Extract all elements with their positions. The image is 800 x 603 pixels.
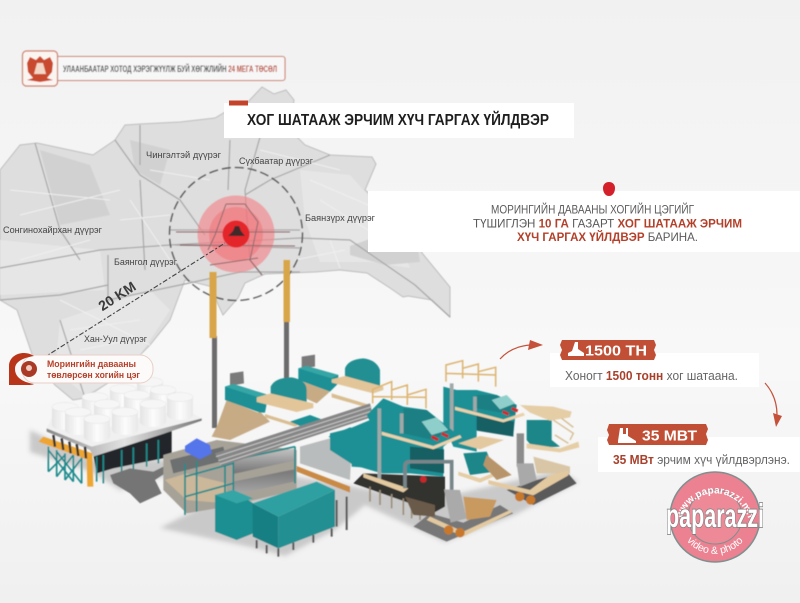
label pill — [22, 355, 153, 383]
arrow 1 head — [528, 340, 543, 350]
description block — [473, 182, 742, 244]
boiler 1 dark base — [353, 473, 445, 515]
red pin tab — [9, 353, 34, 385]
stamp disc — [670, 472, 760, 562]
label: Chingeltei: Чингэлтэй дүүрэг — [146, 150, 222, 160]
location label — [9, 353, 153, 385]
label: Bayanzurkh: Баянзүрх дүүрэг — [305, 213, 376, 223]
card background — [550, 353, 759, 387]
map darker terrain patches — [40, 140, 420, 265]
stat card: 1500 TN — [550, 340, 759, 387]
icon: red marker — [603, 182, 615, 196]
stair section to boiler 2 — [483, 455, 512, 480]
right half of plant — [330, 361, 579, 542]
map roads and district borders — [0, 125, 450, 398]
arched unit 1 body — [271, 377, 307, 407]
card background — [598, 437, 800, 472]
enclosure left top — [215, 490, 253, 503]
storage platform underside — [93, 430, 172, 473]
boiler 2 red valves — [503, 408, 518, 414]
boiler 1 side teal lower — [463, 452, 495, 475]
enclosure left block — [215, 490, 253, 540]
waste plant illustration — [30, 260, 579, 557]
hopper chutes — [53, 435, 86, 458]
tag ribbon — [560, 340, 656, 360]
boiler 1 vent panel — [422, 417, 448, 435]
curved arrow to 35 MW — [765, 383, 782, 427]
boiler 2 mid deck — [527, 442, 579, 452]
city district map — [0, 87, 450, 400]
ribbon frame — [56, 56, 285, 80]
distance label 20 KM: 20 KM — [95, 278, 139, 314]
chimney 2 gold top — [284, 260, 290, 322]
left teal unit top — [225, 384, 268, 398]
white grey machinery — [300, 438, 352, 480]
boiler 1 ducts — [379, 408, 402, 480]
label line 2: төвлөрсөн хогийн цэг — [47, 370, 140, 381]
tag ribbon — [607, 424, 708, 445]
description line 2: ТҮШИГЛЭН 10 ГА ГАЗАРТ ХОГ ШАТААЖ ЭРЧИМ — [473, 216, 742, 230]
boiler 1 red drum — [420, 476, 427, 483]
card text: Хоногт 1500 тонн хог шатаана. — [565, 369, 738, 383]
teal frame — [185, 447, 295, 515]
boiler 1 floor shadow — [413, 505, 513, 542]
boiler 2 lower deck — [488, 471, 568, 495]
icon: location pin core — [26, 365, 32, 371]
arrow 2 head — [773, 413, 782, 427]
right teal unit body — [298, 366, 338, 392]
chimney 2 — [284, 260, 290, 380]
title accent bar — [229, 100, 248, 106]
description line 1: МОРИНГИЙН ДАВААНЫ ХОГИЙН ЦЭГИЙГ — [491, 202, 694, 216]
emblem frame — [22, 51, 58, 86]
left gray vent — [230, 371, 244, 386]
arrow 1 line — [500, 345, 530, 359]
teal block behind machinery — [328, 427, 377, 468]
right teal unit top — [298, 366, 338, 378]
stamp inner ring — [688, 490, 742, 544]
tag value: 1500 ТН — [585, 342, 647, 360]
middle pink halo — [209, 207, 263, 261]
storage tanks — [52, 377, 193, 442]
boiler 1 railing — [373, 382, 426, 408]
tag value: 35 МВТ — [642, 428, 697, 444]
boiler 2 body — [443, 387, 517, 452]
stamp top text: www.paparazzi.mn — [678, 488, 752, 518]
description line 3: ХҮЧ ГАРГАХ ҮЙЛДВЭР БАРИНА. — [517, 229, 698, 244]
outer pink halo — [198, 196, 274, 272]
boiler 1 side teal mass — [330, 420, 382, 473]
header badge — [22, 51, 285, 86]
boiler 1 body — [367, 398, 458, 477]
tank row — [137, 377, 163, 405]
ribbon text: УЛААНБААТАР ХОТОД ХЭРЭГЖҮҮЛЖ БУЙ ХӨГЖЛИЙН 24 МЕГА ТӨСӨЛ — [63, 63, 277, 75]
boiler 1 grey duct — [405, 462, 452, 497]
label: Sukhbaatar: Сүхбаатар дүүрэг — [239, 156, 314, 166]
stat card: 35 MW — [598, 424, 800, 472]
arched unit 2 body — [345, 358, 380, 387]
icon: power plant — [618, 428, 636, 443]
boiler 1 brown debris — [463, 497, 497, 520]
label line 1: Морингийн давааны — [47, 359, 136, 370]
enclosure legs and base — [257, 497, 347, 557]
left teal unit body — [225, 384, 268, 413]
boiler 2 wheels — [515, 492, 535, 505]
conveyor ducts — [110, 467, 165, 503]
icon: furnace — [568, 342, 584, 356]
boiler 2 deck — [455, 407, 525, 422]
central roads over halo — [176, 204, 295, 275]
target radius circles — [170, 168, 302, 300]
boiler 2 vent panel — [492, 395, 515, 409]
arched unit 1 deck — [257, 393, 313, 412]
chimney 1 base — [212, 336, 217, 428]
horizontal pipes — [233, 448, 294, 495]
emblem centre — [34, 63, 46, 74]
curved arrow to 1500 TN — [500, 340, 543, 359]
chimney 1 gold top — [210, 272, 216, 338]
watermark stamp — [666, 471, 764, 563]
mid teal small block — [290, 415, 323, 427]
district labels — [3, 150, 376, 344]
icon: location pin ring — [21, 361, 37, 377]
boiler 2 dark lower — [477, 415, 514, 437]
label: Songinokhairkhan: Сонгинохайрхан дүүрэг — [3, 225, 103, 235]
hopper cluster — [405, 497, 435, 517]
boiler 1 walkway — [363, 473, 408, 492]
label: Bayangol: Баянгол дүүрэг — [114, 257, 178, 267]
enclosure main top — [253, 482, 335, 517]
chimney 2 base — [284, 320, 289, 380]
map lighter urban blocks — [0, 170, 410, 395]
boiler 2 ducts — [452, 383, 475, 433]
upper gray pipe rack — [215, 403, 373, 466]
boiler 1 wheels — [444, 525, 465, 537]
card text: 35 МВт эрчим хүч үйлдвэрлэнэ. — [613, 453, 790, 467]
arched unit 1 lower deck — [265, 414, 307, 427]
arrow 2 line — [765, 383, 777, 415]
boiler 1 right lower deck — [458, 472, 497, 483]
stamp bottom text: video & photo — [688, 537, 742, 556]
platform silver soffit — [47, 418, 202, 457]
right gray vent — [302, 355, 315, 369]
chimney 1 — [210, 272, 217, 428]
distance line — [48, 243, 225, 355]
icon: city emblem — [27, 56, 53, 82]
title background — [224, 103, 574, 138]
boiler 1 right upper deck — [458, 436, 504, 449]
boiler 2 grey chute — [517, 463, 537, 487]
icon: waste pile — [228, 226, 245, 236]
base stripes — [370, 487, 420, 520]
rack light lines — [216, 407, 373, 464]
boiler 1 grey chute — [444, 489, 467, 523]
boiler 1 dark lower — [410, 447, 444, 473]
orange conveyor — [297, 466, 350, 493]
boiler 2 grey column — [517, 433, 524, 467]
machinery warm highlight — [165, 473, 227, 503]
boiler 1 bottom deck — [427, 510, 512, 537]
boiler 2 side teal — [527, 420, 560, 448]
map outline — [0, 87, 450, 400]
boiler 2 stairs — [553, 418, 573, 443]
machinery dark detail — [170, 447, 227, 473]
floor shadows — [30, 430, 578, 556]
boiler 1 red valves — [432, 433, 448, 440]
boiler 2 low machinery — [533, 457, 570, 473]
left teal unit support — [217, 400, 260, 427]
arched unit 2 lower deck — [332, 393, 370, 408]
platform deck — [47, 397, 202, 447]
left half of plant — [38, 355, 383, 557]
gold support behind rack — [212, 412, 270, 440]
boiler 2 upper catwalk — [520, 405, 572, 421]
enclosure main side — [278, 490, 335, 548]
label: Khan-Uul: Хан-Уул дүүрэг — [84, 334, 148, 344]
blue unit — [185, 438, 212, 459]
process machinery frame — [163, 440, 297, 513]
white description band — [368, 191, 800, 252]
right unit support — [298, 380, 330, 403]
arched unit 2 deck — [332, 376, 383, 393]
boiler 2 railing — [446, 361, 496, 387]
platform support legs — [48, 440, 158, 483]
boiler 2 hood shade — [477, 395, 517, 415]
boiler 2 ground shadow — [507, 472, 577, 505]
dashed 20 km ring — [170, 168, 302, 300]
title text: ХОГ ШАТААЖ ЭРЧИМ ХҮЧ ГАРГАХ ҮЙЛДВЭР — [247, 111, 549, 129]
map thin street grid — [10, 150, 400, 350]
orange hopper strip — [38, 437, 93, 487]
boiler 1 deck — [382, 432, 462, 449]
title panel — [224, 100, 574, 138]
boiler 1 hood shade — [403, 408, 450, 440]
enclosure main front — [253, 503, 278, 548]
red core — [222, 220, 250, 248]
